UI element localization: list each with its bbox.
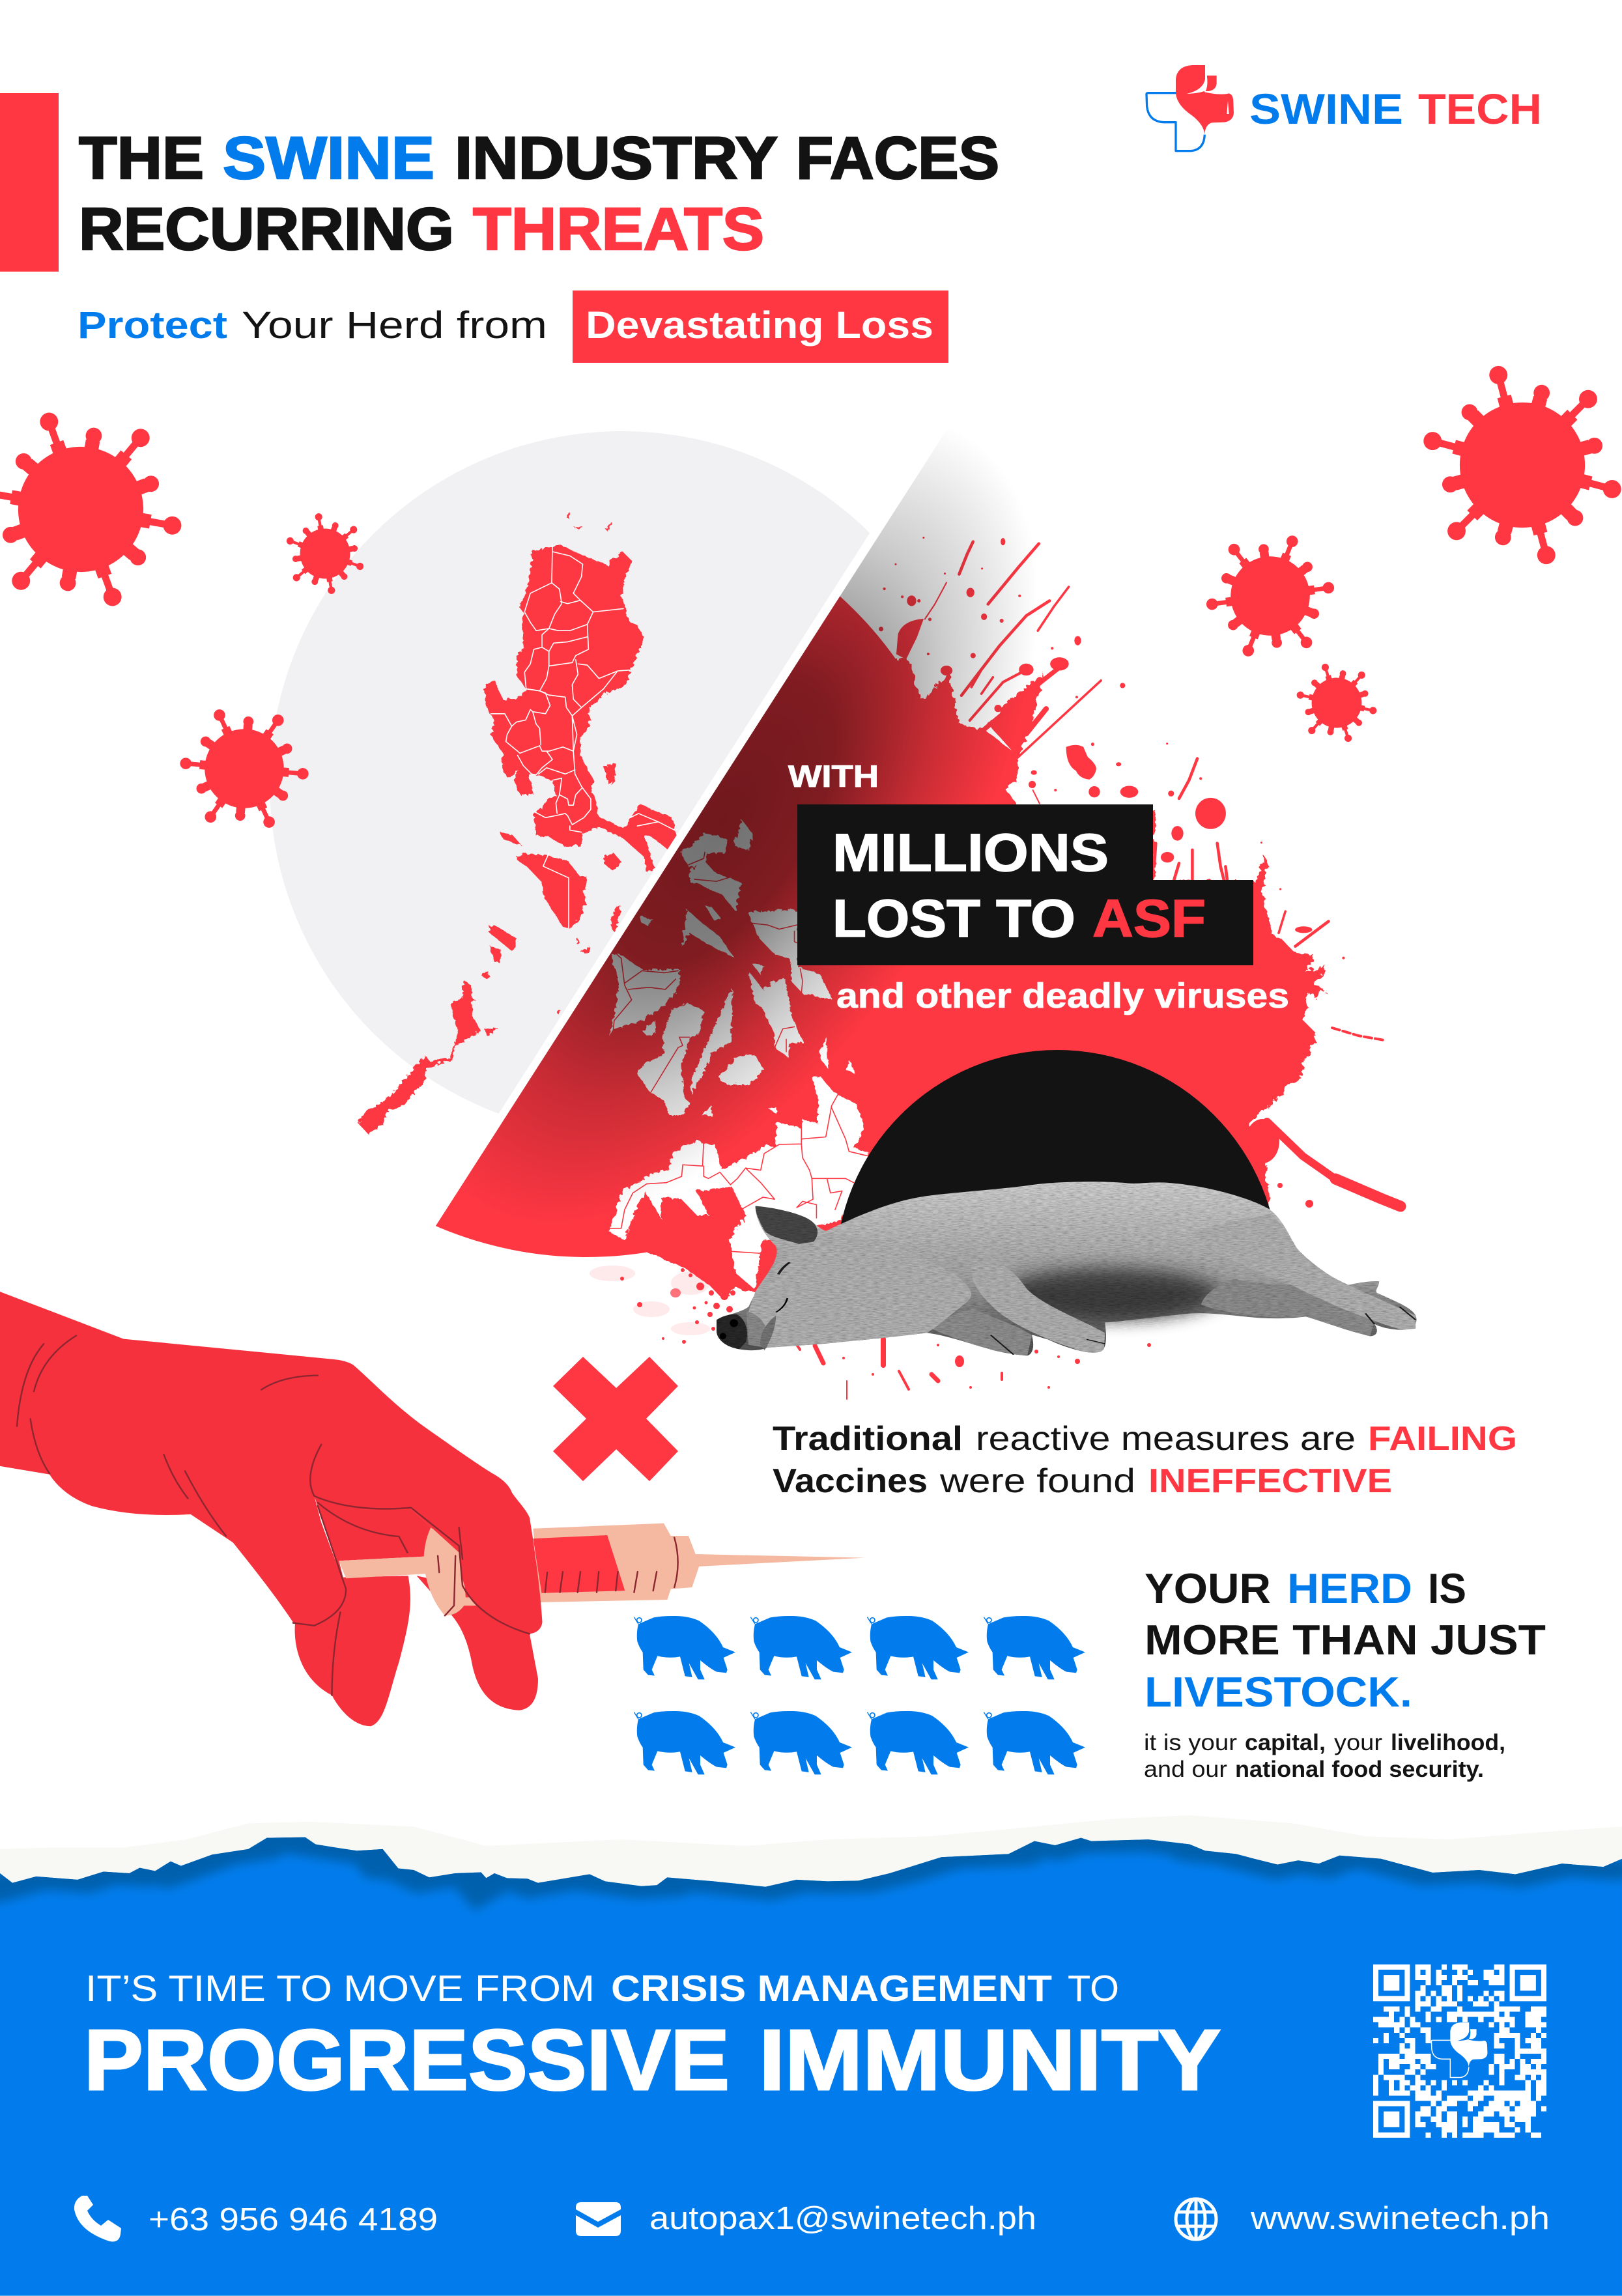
pale spatter patches xyxy=(590,1266,710,1335)
icon: large virus top left xyxy=(0,403,197,616)
text block: your herd: MORE THAN JUST xyxy=(1145,1616,1546,1664)
text block: your herd: HERD xyxy=(1287,1565,1412,1612)
title: THE xyxy=(79,125,204,191)
text block: capital and livelihood: capital, xyxy=(1245,1730,1326,1755)
call to action headline: PROGRESSIVE xyxy=(84,2012,730,2108)
red label box xyxy=(573,291,948,363)
title xyxy=(79,125,999,262)
text block: capital and livelihood xyxy=(1144,1730,1505,1782)
blood spatter below the disc and pig xyxy=(590,1264,1151,1399)
email address: autopax1@swinetech.ph xyxy=(649,2201,1036,2236)
call to action intro: CRISIS MANAGEMENT xyxy=(611,1968,1052,2009)
drips under the pig xyxy=(795,1339,1002,1399)
icon: small virus xyxy=(274,506,376,601)
red disc xyxy=(435,597,896,1257)
text block: failing measures: Traditional xyxy=(773,1420,963,1458)
herd of blue pig icons xyxy=(634,1616,1085,1774)
snout xyxy=(717,1314,747,1349)
subtitle: Protect xyxy=(78,304,227,347)
grey background circle xyxy=(270,431,870,1114)
Luzon xyxy=(484,545,677,873)
icon: globe xyxy=(1176,2199,1216,2239)
title: THREATS xyxy=(473,196,764,262)
text block: your herd: YOUR xyxy=(1145,1565,1271,1612)
subtitle: Devastating Loss xyxy=(586,304,933,347)
QR data modules xyxy=(1373,1967,1546,2135)
icon: small virus right xyxy=(1289,659,1384,746)
dark shadow gradient along the diagonal xyxy=(472,446,1023,1204)
logo wordmark: SWINE xyxy=(1249,85,1403,133)
head xyxy=(748,1233,971,1348)
torn paper edge and blue footer xyxy=(0,1815,1622,2296)
callout: millions lost to ASF xyxy=(788,759,1289,1015)
foreleg xyxy=(971,1260,1105,1353)
Mindoro and outlying islands xyxy=(357,511,677,1133)
glove creases and syringe ticks xyxy=(17,1335,678,1695)
syringe xyxy=(533,1524,865,1602)
splash arm lower right xyxy=(1245,1028,1401,1208)
text block: capital and livelihood: and our xyxy=(1144,1757,1227,1782)
text block: capital and livelihood: it is your xyxy=(1144,1730,1237,1755)
map: Luzon, Mindoro and Palawan xyxy=(357,511,677,1133)
hind leg upper xyxy=(1192,1213,1416,1330)
icon: medium virus left xyxy=(175,706,313,831)
subtitle xyxy=(78,291,948,363)
call to action intro: IT’S TIME TO MOVE FROM xyxy=(85,1968,595,2009)
QR finder patterns xyxy=(1376,1967,1544,2135)
callout text: ASF xyxy=(1092,889,1206,948)
blood splatter body xyxy=(586,656,1325,1296)
title: INDUSTRY xyxy=(455,125,778,191)
subtitle: Your Herd from xyxy=(242,304,547,347)
dead pig photo illustration xyxy=(717,1182,1416,1355)
text block: failing measures: Vaccines xyxy=(773,1462,928,1500)
callout text: LOST xyxy=(832,889,980,948)
red X mark xyxy=(553,1357,678,1481)
icon: mail xyxy=(576,2202,621,2236)
text block: failing measures: FAILING xyxy=(1368,1420,1517,1458)
call to action headline: IMMUNITY xyxy=(759,2012,1221,2108)
text block: capital and livelihood: your xyxy=(1334,1730,1382,1755)
text block: your herd: LIVESTOCK. xyxy=(1145,1668,1412,1716)
callout sub line: and other deadly viruses xyxy=(836,976,1289,1015)
headline accent bar xyxy=(0,93,59,272)
black stepped box xyxy=(797,804,1253,965)
blue footer panel xyxy=(0,1837,1622,2296)
text block: capital and livelihood: livelihood, xyxy=(1391,1730,1505,1755)
text block: failing measures xyxy=(773,1420,1517,1500)
with label: WITH xyxy=(788,759,879,793)
website: www.swinetech.ph xyxy=(1250,2201,1550,2236)
call to action intro xyxy=(85,1968,1119,2009)
province boundaries xyxy=(491,545,675,928)
title: SWINE xyxy=(223,125,434,191)
phone number: +63 956 946 4189 xyxy=(149,2202,438,2237)
callout text xyxy=(832,823,1206,948)
title: RECURRING xyxy=(79,196,454,262)
callout text: MILLIONS xyxy=(832,823,1109,883)
ear xyxy=(756,1206,818,1244)
callout text: TO xyxy=(996,889,1075,948)
QR code xyxy=(1373,1967,1546,2135)
call to action xyxy=(84,1968,1221,2108)
row one pigs xyxy=(634,1616,1085,1679)
glove palm xyxy=(0,1292,543,1634)
Visayas islands cut out of the splatter xyxy=(608,819,868,1288)
text block: failing measures: were found xyxy=(939,1462,1135,1500)
logo mark xyxy=(1146,65,1234,151)
belly shadow xyxy=(1000,1268,1219,1320)
blood splatter rays and droplets xyxy=(879,537,1345,959)
feet and toes xyxy=(991,1307,1416,1355)
paper shadow xyxy=(0,1837,1622,1887)
gloved hand holding syringe xyxy=(0,1292,865,1726)
icon: phone xyxy=(74,2196,121,2242)
call to action intro: TO xyxy=(1068,1968,1119,2009)
hind leg lower xyxy=(1201,1279,1377,1336)
row two pigs xyxy=(634,1711,1085,1774)
fingers behind syringe xyxy=(295,1496,538,1726)
text block: failing measures: reactive measures are xyxy=(976,1420,1356,1458)
fine droplets xyxy=(620,1264,735,1344)
icon: large virus top right xyxy=(1401,352,1622,578)
paper strip xyxy=(0,1815,1622,1920)
icon: medium virus right xyxy=(1199,531,1342,661)
under foreleg xyxy=(932,1309,1032,1355)
red splatter wedge with the southern map xyxy=(207,326,1401,1368)
text block: capital and livelihood: national food security. xyxy=(1235,1757,1484,1782)
Mindanao xyxy=(608,1075,868,1288)
pig body xyxy=(717,1182,1416,1355)
boundaries on the southern islands xyxy=(610,852,866,1253)
logo: Swine Tech xyxy=(1146,65,1542,151)
title: FACES xyxy=(796,125,999,191)
text block: your herd: IS xyxy=(1428,1565,1466,1612)
viruses floating around the map xyxy=(0,352,1622,831)
call to action headline xyxy=(84,2012,1221,2108)
text block: failing measures: INEFFECTIVE xyxy=(1148,1462,1392,1500)
logo: Swine Tech: TECH xyxy=(1418,85,1542,133)
contact row xyxy=(74,2196,1550,2242)
QR centre logo xyxy=(1431,2022,1487,2078)
text block: your herd xyxy=(1145,1565,1546,1716)
black half dome behind pig xyxy=(841,1050,1270,1224)
